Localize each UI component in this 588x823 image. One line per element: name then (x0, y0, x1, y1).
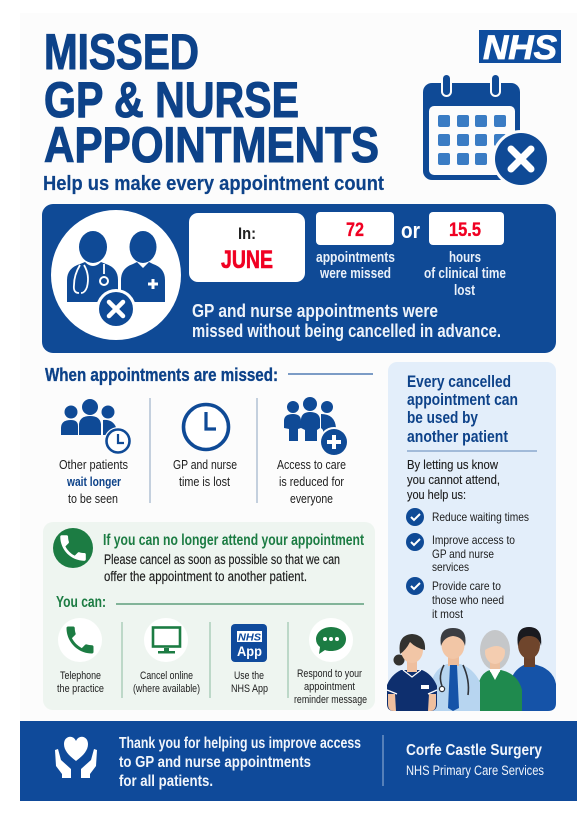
icon: heart in hands (55, 737, 97, 778)
month box: In: (238, 224, 256, 243)
benefit: improve access (406, 533, 515, 574)
caption: wait longer (66, 474, 121, 489)
statement text: GP and nurse appointments were (192, 300, 438, 321)
icon: people with plus (284, 397, 349, 457)
impact: access reduced (277, 397, 349, 506)
impact: patients wait longer (59, 399, 132, 506)
icon: green phone (53, 528, 93, 568)
intro text: you help us: (407, 487, 466, 502)
panel: how to cancel (43, 522, 375, 710)
statement text (192, 300, 501, 341)
heading: Every cancelled (407, 373, 511, 391)
icon: people with clock (61, 399, 132, 455)
heading: be used by (407, 409, 479, 427)
heading: when appointments are missed: When appointments are missed: (45, 364, 278, 385)
stat: clinical hours lost: of clinical time (424, 266, 506, 282)
instructions: offer the appointment to another patient. (104, 569, 307, 584)
month box (189, 213, 305, 282)
illustration: patients and staff (387, 627, 556, 711)
caption: Access to care (277, 457, 346, 472)
benefit: provide care: it most (432, 607, 464, 621)
surgery name: NHS Primary Care Services (406, 763, 544, 778)
heading: another patient (407, 428, 508, 446)
stat: appointments missed: were missed (319, 266, 391, 282)
benefit: provide care: Provide care to (432, 579, 501, 593)
option: NHS App: NHS (238, 632, 261, 644)
stat: appointments missed: 72 (346, 220, 364, 241)
person: nurse (387, 634, 437, 711)
icon: clock (184, 404, 228, 450)
option: reminder message: reminder message (294, 694, 367, 706)
title: GP & NURSE (44, 72, 299, 128)
intro text: you cannot attend, (407, 472, 500, 487)
caption (173, 457, 237, 489)
stat: appointments missed: appointments (316, 250, 395, 266)
instructions: Please cancel as soon as possible so that we can (104, 552, 340, 567)
option: cancel online: Cancel online (140, 670, 193, 682)
caption: time is lost (179, 474, 230, 489)
instructions (104, 552, 340, 584)
impact: clinical time lost (173, 404, 237, 489)
heading (407, 373, 518, 446)
surgery name: Corfe Castle Surgery (406, 742, 542, 759)
word: or: or (401, 218, 420, 243)
benefit: improve access: services (432, 560, 469, 574)
heading: no longer attend: If you can no longer attend your appointment (103, 532, 365, 549)
panel: monthly statistics (42, 204, 556, 353)
title: MISSED (44, 24, 199, 80)
option: reminder message: appointment (304, 681, 355, 693)
option: telephone (57, 618, 104, 695)
title: APPOINTMENTS (44, 117, 379, 173)
heading: you can: You can: (56, 594, 106, 611)
option: NHS App: App (237, 644, 262, 659)
person: doctor (432, 628, 480, 711)
icon: calendar with cross (423, 74, 550, 188)
stat: clinical hours lost: lost (454, 283, 475, 299)
option: reminder message (294, 618, 367, 706)
thank you message: for all patients. (119, 773, 213, 790)
benefit: improve access: Improve access to (432, 533, 515, 547)
option: NHS App (231, 624, 268, 695)
stat: clinical hours lost: 15.5 (449, 220, 481, 241)
person: man in blue (511, 627, 556, 711)
thank you message: to GP and nurse appointments (119, 754, 311, 771)
benefit: provide care (406, 577, 504, 621)
heading: appointment can (407, 391, 518, 409)
caption: GP and nurse (173, 457, 237, 472)
stat: clinical hours lost (424, 212, 506, 299)
thank you message (119, 735, 361, 790)
caption (59, 457, 128, 506)
NHS logo: NHS (483, 29, 557, 67)
option: cancel online (133, 618, 200, 695)
person: older woman in green (478, 630, 522, 711)
statement text: missed without being cancelled in advance. (192, 320, 501, 341)
caption: everyone (290, 491, 333, 506)
benefit: improve access: GP and nurse (432, 547, 494, 561)
caption: is reduced for (279, 474, 345, 489)
intro text (407, 457, 500, 502)
subtitle: Help us make every appointment count (43, 173, 384, 195)
stat: appointments missed (316, 212, 395, 282)
thank you message: Thank you for helping us improve access (119, 735, 361, 752)
stat: clinical hours lost: hours (449, 250, 481, 266)
footer banner (20, 721, 577, 801)
surgery name (406, 742, 544, 778)
intro text: By letting us know (407, 457, 499, 472)
option: NHS App: NHS App (231, 683, 268, 695)
caption: to be seen (68, 491, 118, 506)
month box: JUNE (221, 246, 273, 274)
option: cancel online: (where available) (133, 683, 200, 695)
caption (277, 457, 346, 506)
title (44, 24, 379, 173)
caption: Other patients (59, 457, 128, 472)
benefit: provide care: those who need (432, 593, 504, 607)
panel: every cancelled appointment (387, 362, 556, 711)
option: NHS App: Use the (234, 670, 264, 682)
benefit: reduce waiting times (406, 508, 529, 526)
option: telephone: the practice (57, 683, 104, 695)
benefit: reduce waiting times: Reduce waiting times (432, 510, 529, 524)
option: telephone: Telephone (60, 670, 101, 682)
option: reminder message: Respond to your (297, 668, 362, 680)
icon: clinicians with cross (51, 210, 181, 340)
